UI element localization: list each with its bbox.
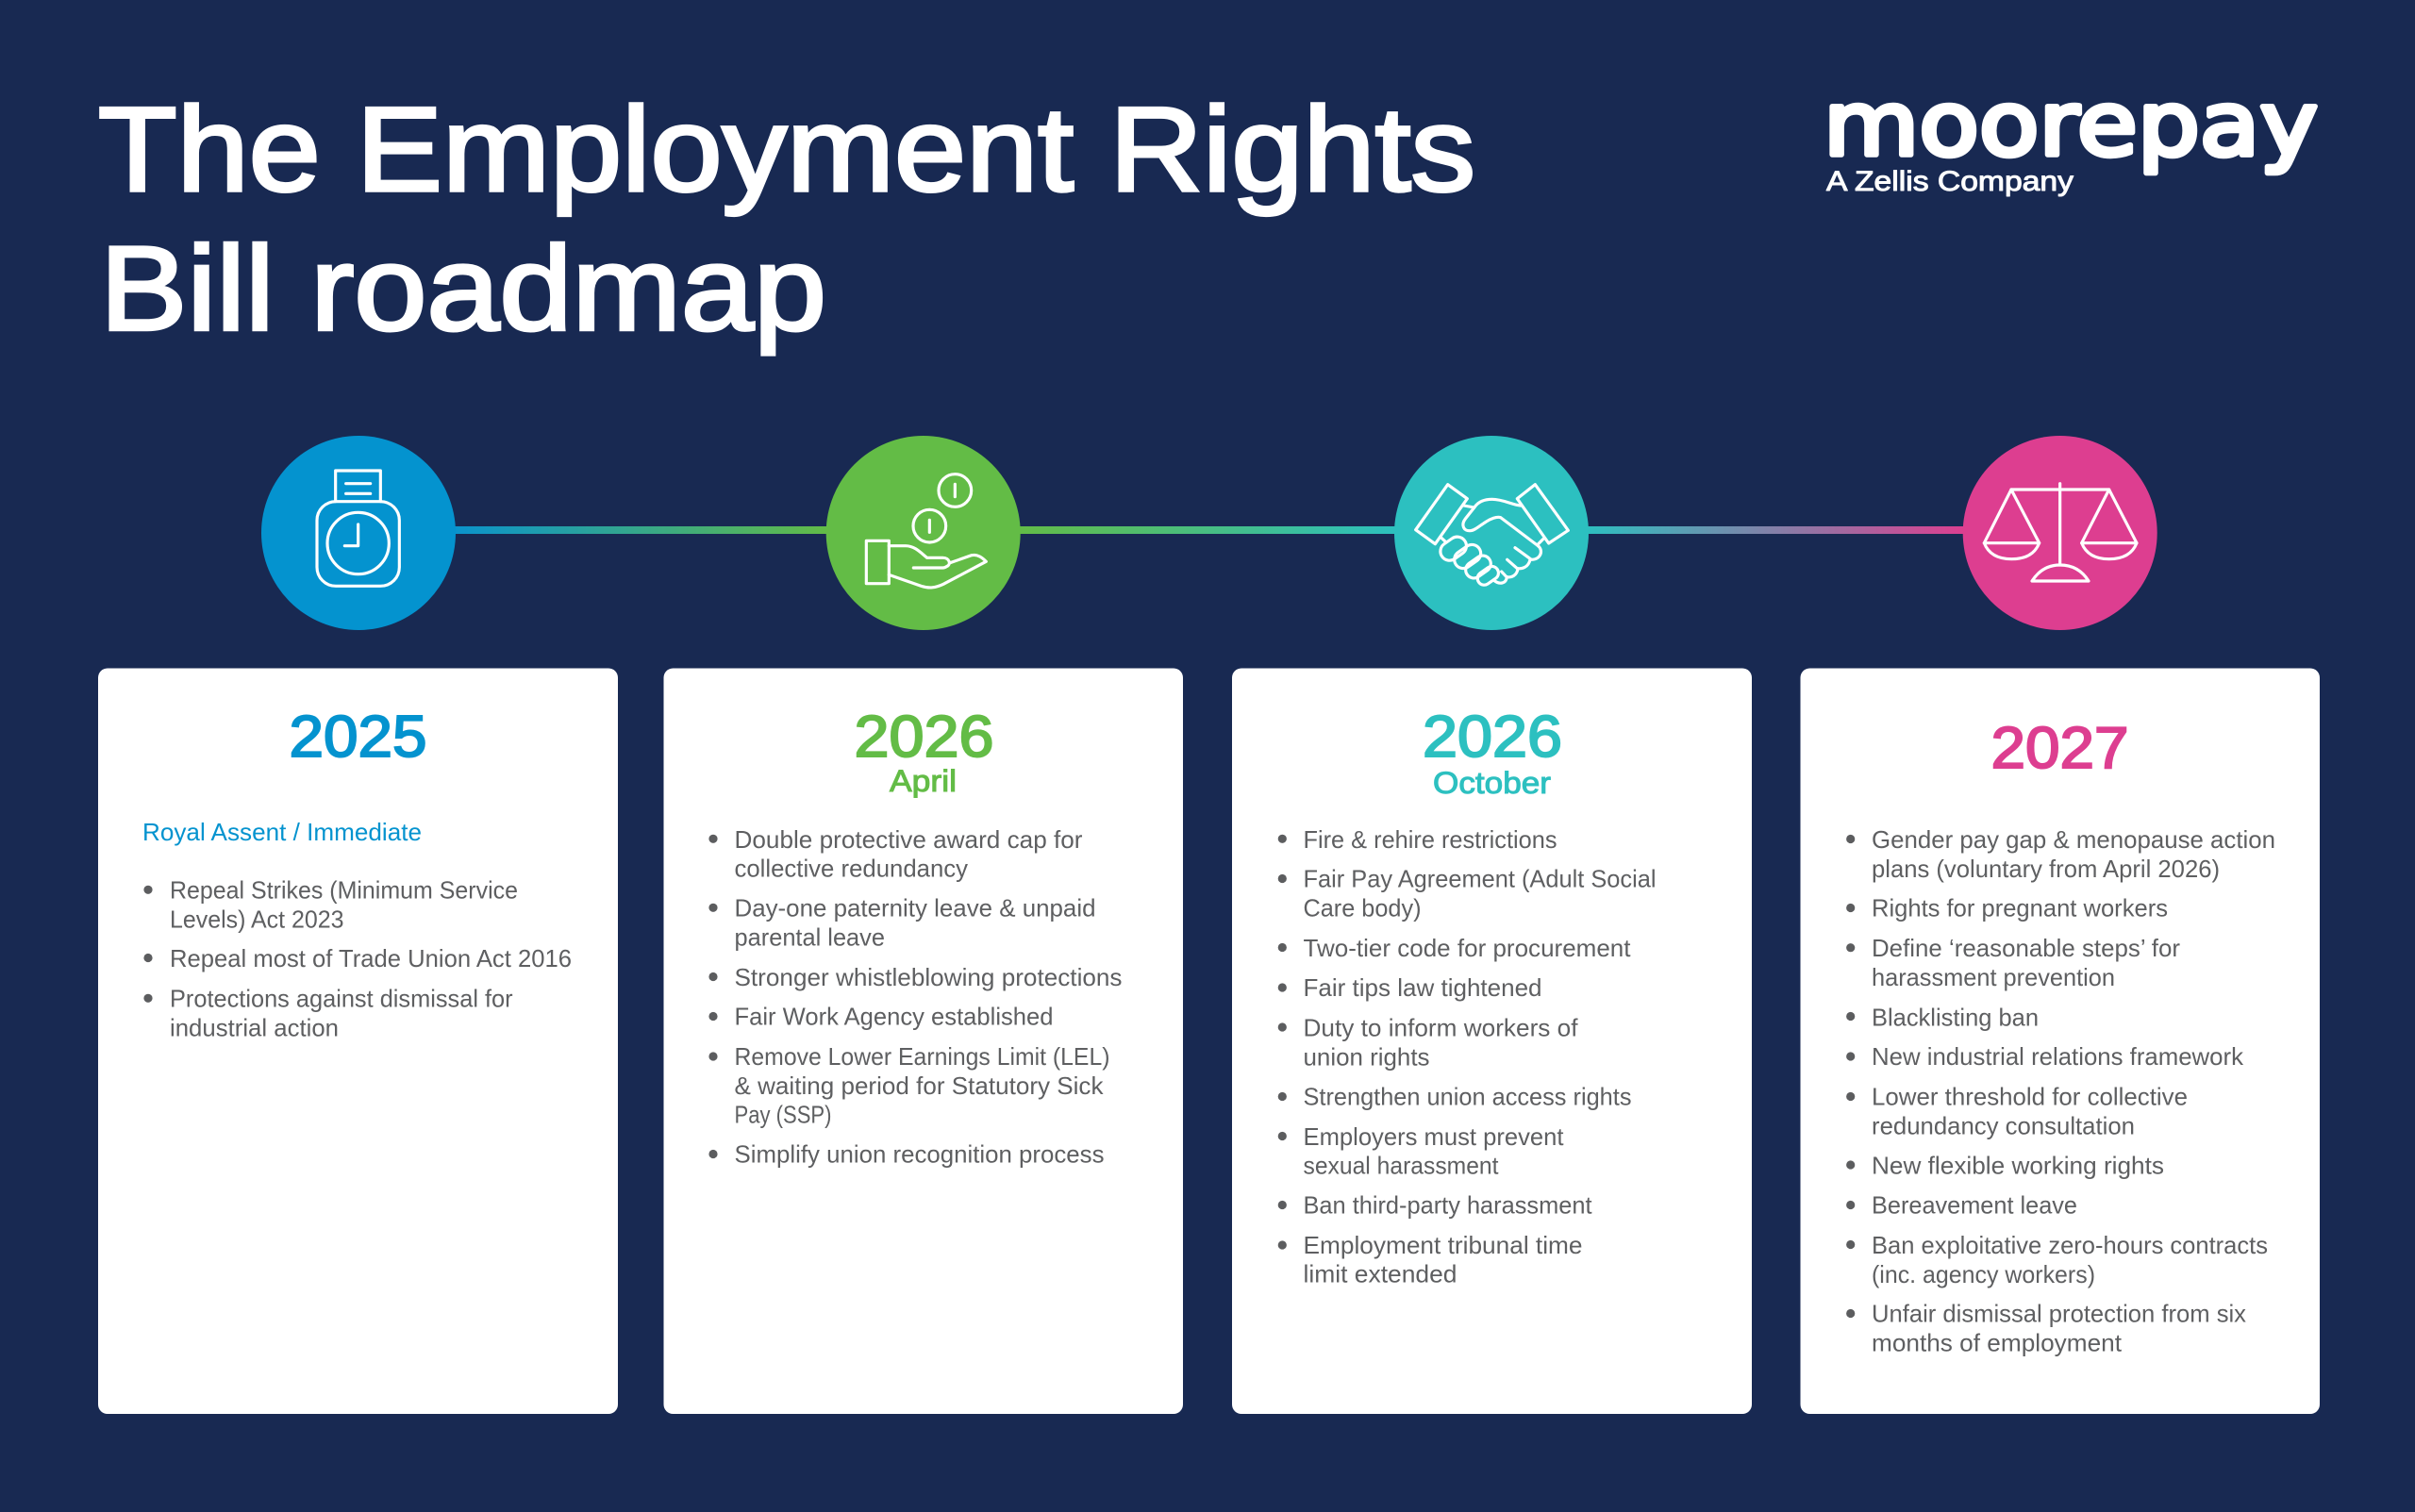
year heading: 2027 — [1990, 716, 2128, 781]
list item: months of employment — [1872, 1328, 2123, 1356]
list item — [1278, 865, 1657, 922]
list item: sexual harassment — [1304, 1152, 1499, 1180]
list item: Protections against dismissal for — [170, 985, 513, 1013]
list item: Ban third-party harassment — [1304, 1191, 1592, 1220]
list item: plans (voluntary from April 2026) — [1872, 855, 2220, 883]
timeline connector: April 2026 to October 2026 — [1017, 526, 1399, 534]
list item — [1846, 1300, 2246, 1356]
list item — [1846, 934, 2180, 991]
card background — [664, 668, 1183, 1414]
list item: Simplify union recognition process — [734, 1140, 1104, 1169]
subheading: April — [890, 764, 957, 798]
list item: Strengthen union access rights — [1304, 1083, 1632, 1111]
list item: Blacklisting ban — [1872, 1003, 2039, 1031]
list item — [708, 1042, 1109, 1129]
list item: Repeal most of Trade Union Act 2016 — [170, 944, 572, 972]
card background — [1232, 668, 1752, 1414]
timeline connector: 2025 to April 2026 — [453, 526, 830, 534]
list item — [1846, 1083, 2188, 1139]
panel: 2025 — [98, 668, 618, 1414]
list item: Unfair dismissal protection from six — [1872, 1300, 2246, 1328]
icon: handshake — [1394, 436, 1589, 630]
list item: Fair Work Agency established — [734, 1003, 1053, 1031]
list item: Lower threshold for collective — [1872, 1083, 2188, 1111]
list item: limit extended — [1304, 1259, 1457, 1288]
list item — [1278, 1013, 1578, 1072]
icon: scales of justice — [1963, 436, 2157, 630]
list item: Pay (SSP) — [734, 1101, 832, 1129]
list item: collective redundancy — [734, 855, 968, 883]
list item: Stronger whistleblowing protections — [734, 963, 1123, 991]
list item: Gender pay gap & menopause action — [1872, 825, 2275, 854]
title: The Employment Rights — [98, 82, 1475, 216]
list item: Ban exploitative zero-hours contracts — [1872, 1231, 2268, 1259]
list item: (inc. agency workers) — [1872, 1260, 2095, 1288]
year heading: 2026 — [1423, 705, 1562, 770]
panel: 2026 October — [1232, 668, 1752, 1414]
list item — [143, 985, 513, 1041]
list item: harassment prevention — [1872, 963, 2115, 991]
list item: Care body) — [1304, 893, 1421, 922]
list item — [1846, 825, 2275, 883]
list item: Fire & rehire restrictions — [1304, 825, 1557, 854]
list item — [143, 875, 518, 933]
list item — [708, 894, 1096, 951]
logo: moorepay: A Zellis Company — [1826, 166, 2074, 197]
icon: clock with card — [261, 436, 456, 630]
list item: & waiting period for Statutory Sick — [734, 1072, 1104, 1100]
list item: Fair Pay Agreement (Adult Social — [1304, 865, 1657, 893]
icon: hand with coins — [826, 436, 1021, 630]
title: Bill roadmap — [100, 221, 826, 355]
list item: New industrial relations framework — [1872, 1042, 2244, 1071]
year heading: 2026 — [855, 705, 994, 770]
list item: parental leave — [734, 922, 885, 951]
panel: 2026 April — [664, 668, 1183, 1414]
list item — [1278, 1122, 1564, 1180]
list item — [708, 825, 1083, 883]
list item: redundancy consultation — [1872, 1111, 2135, 1139]
list item: Rights for pregnant workers — [1872, 894, 2168, 922]
list item: union rights — [1304, 1043, 1430, 1072]
list item: Define ‘reasonable steps’ for — [1872, 934, 2180, 962]
list item: New flexible working rights — [1872, 1151, 2164, 1179]
panel: 2027 — [1800, 668, 2320, 1414]
list item: Duty to inform workers of — [1304, 1013, 1578, 1041]
list item: Day-one paternity leave & unpaid — [734, 894, 1096, 922]
list item: Employers must prevent — [1304, 1122, 1564, 1151]
list item: Fair tips law tightened — [1304, 973, 1541, 1002]
subheading: Royal Assent / Immediate — [142, 818, 422, 846]
list item: industrial action — [170, 1013, 339, 1041]
list item: Double protective award cap for — [734, 825, 1083, 854]
list item: Repeal Strikes (Minimum Service — [170, 875, 518, 904]
list item — [1846, 1231, 2268, 1288]
card background — [98, 668, 618, 1414]
timeline connector: October 2026 to 2027 — [1585, 526, 1967, 534]
list item: Employment tribunal time — [1304, 1231, 1583, 1259]
list item — [1278, 1231, 1583, 1288]
list item: Two-tier code for procurement — [1304, 934, 1631, 962]
list item: Bereavement leave — [1872, 1191, 2077, 1220]
subheading: October — [1433, 766, 1551, 800]
title — [98, 82, 1475, 355]
list item: Remove Lower Earnings Limit (LEL) — [734, 1042, 1109, 1071]
list item: Levels) Act 2023 — [170, 905, 343, 933]
card background — [1800, 668, 2320, 1414]
year heading: 2025 — [289, 705, 426, 770]
logo: moorepay: moorepay — [1824, 74, 2318, 176]
